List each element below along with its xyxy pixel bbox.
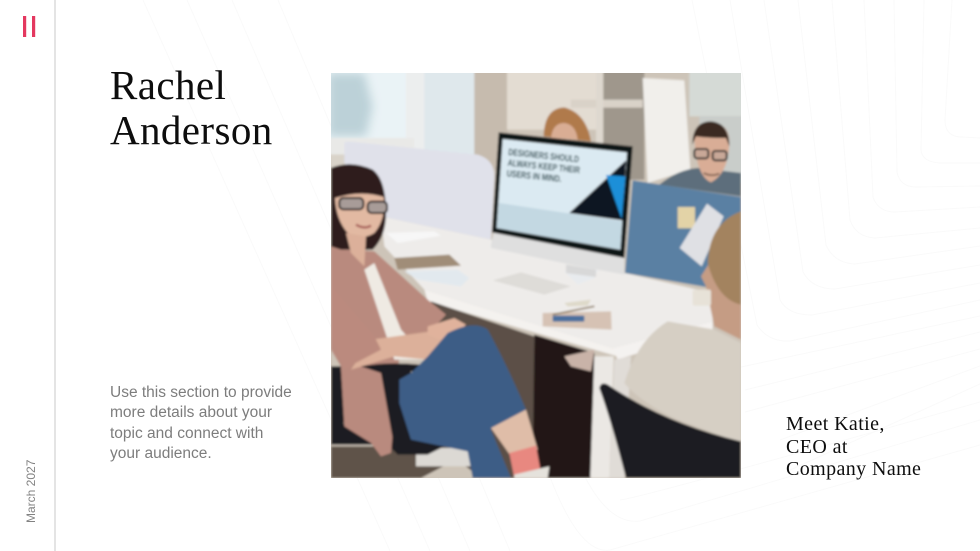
black chair	[599, 384, 741, 478]
background wall	[328, 70, 744, 483]
desk papers	[388, 232, 438, 242]
text block: description	[110, 384, 292, 462]
monitor screen text: DESIGNERS SHOULD	[508, 147, 580, 164]
photo: office scene	[331, 73, 741, 478]
background woman	[544, 107, 591, 141]
man with glasses	[659, 168, 741, 196]
white partition	[344, 142, 494, 240]
caption: CEO at	[786, 436, 848, 458]
date label: March 2027	[24, 460, 38, 523]
caption	[786, 413, 921, 480]
title	[110, 62, 273, 153]
man foreground	[624, 321, 741, 443]
text block: description: Use this section to provide	[110, 384, 292, 401]
text block: description: your audience.	[110, 445, 212, 462]
title: Rachel	[110, 62, 226, 108]
monitor screen text	[506, 147, 581, 184]
caption: Meet Katie,	[786, 413, 885, 435]
woman chair arm	[361, 362, 420, 440]
woman shirt	[331, 246, 446, 456]
woman chair	[331, 366, 344, 423]
desk legs and under-desk	[431, 301, 534, 478]
caption: Company Name	[786, 458, 921, 480]
floor	[331, 444, 443, 478]
monitor screen text: ALWAYS KEEP THEIR	[507, 158, 581, 175]
monitor screen text: USERS IN MIND.	[506, 168, 562, 184]
text block: description: topic and connect with	[110, 425, 263, 442]
sidebar divider	[54, 0, 56, 551]
woman forearm	[351, 331, 451, 370]
woman jeans	[399, 325, 526, 478]
woman head	[331, 164, 386, 250]
icon: pause bars logo	[23, 16, 36, 37]
text block: description: more details about your	[110, 404, 272, 421]
title: Anderson	[110, 107, 273, 153]
desk surface	[381, 216, 713, 348]
blue partition	[625, 180, 741, 293]
monitor	[491, 230, 624, 275]
